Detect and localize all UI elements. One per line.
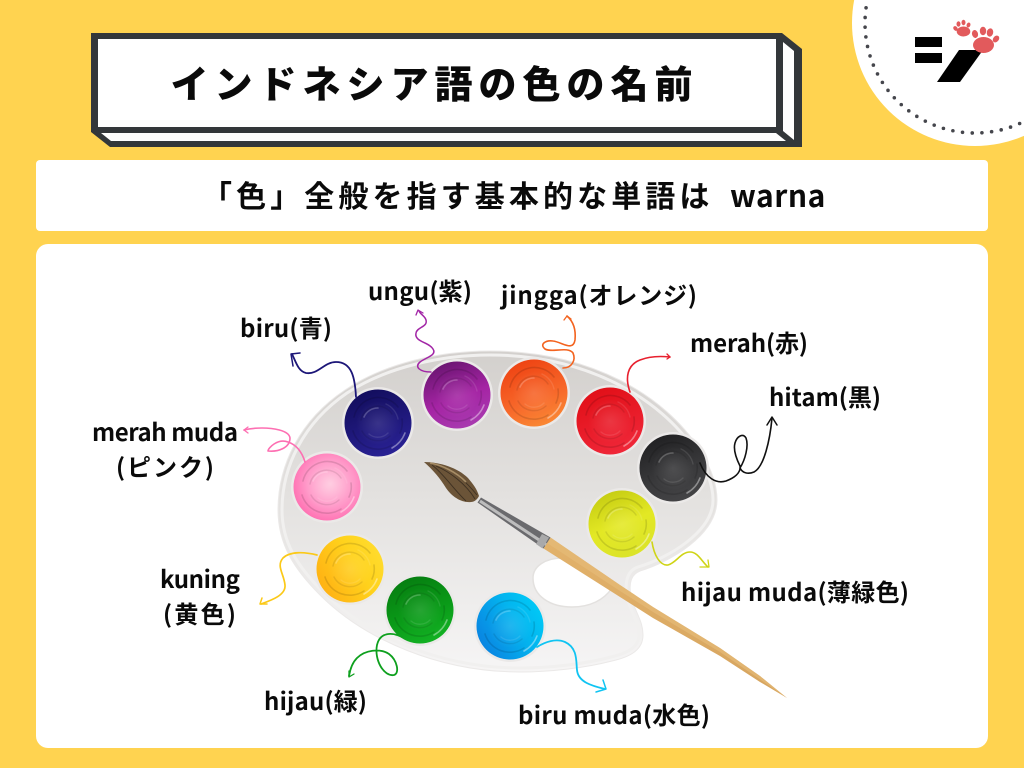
3D frame — [91, 33, 802, 147]
title text: インドネシア語の色の名前 — [170, 54, 699, 109]
label: jingga: jingga(オレンジ) — [499, 276, 697, 311]
label: merah muda — [92, 413, 238, 483]
label: hijau muda: hijau muda(薄緑色) — [681, 573, 909, 608]
paint well: yellow — [314, 533, 386, 605]
paint well: black — [637, 432, 709, 504]
label: merah muda: (ピンク) — [116, 448, 214, 483]
paint brush — [424, 462, 787, 698]
paint well: purple — [421, 359, 493, 431]
arrow: kuning — [260, 553, 317, 604]
label: kuning: (黄色) — [163, 595, 236, 630]
leader lines — [244, 310, 777, 692]
label: merah muda: merah muda — [92, 413, 238, 448]
title box — [91, 33, 802, 147]
palette body — [278, 351, 717, 672]
paint well: navy — [342, 387, 414, 459]
label: kuning: kuning — [160, 560, 240, 595]
arrow: ungu — [416, 310, 434, 372]
label: merah: merah(赤) — [690, 324, 808, 359]
thumb hole — [533, 558, 612, 607]
paint well: orange — [498, 357, 570, 429]
arrow: hitam — [700, 417, 777, 482]
brush handle — [544, 538, 787, 698]
subtitle text: warna — [730, 172, 826, 216]
logo mark — [915, 37, 983, 82]
dotted ring — [865, 0, 1024, 133]
subtitle text: 「色」全般を指す基本的な単語は — [202, 172, 714, 216]
arrow: merah muda — [244, 427, 305, 462]
arrow: jingga — [543, 316, 575, 368]
label: biru muda: biru muda(水色) — [518, 696, 710, 731]
logo badge — [852, 0, 1024, 146]
label: hijau: hijau(緑) — [264, 682, 367, 717]
label: ungu: ungu(紫) — [368, 272, 472, 307]
icon: paw prints — [952, 20, 1001, 53]
arrow: hijau muda — [652, 542, 709, 567]
arrow: hijau — [349, 634, 402, 677]
label: biru: biru(青) — [240, 309, 332, 344]
paint well: red — [574, 385, 646, 457]
brush bristles — [424, 462, 479, 502]
subtitle banner — [36, 160, 988, 231]
paint well: lime — [586, 488, 658, 560]
label: hitam: hitam(黒) — [769, 378, 881, 413]
paint well: sky — [474, 590, 546, 662]
arrow: merah — [627, 354, 670, 392]
badge circle — [852, 0, 1024, 146]
main panel — [36, 244, 988, 748]
palette — [278, 351, 717, 672]
label: kuning — [160, 560, 240, 630]
paint well: pink — [291, 451, 363, 523]
brush ferrule — [478, 498, 550, 548]
paint well: green — [384, 574, 456, 646]
color labels — [92, 272, 909, 731]
arrow: biru muda — [537, 640, 606, 692]
arrow: biru — [291, 353, 356, 397]
